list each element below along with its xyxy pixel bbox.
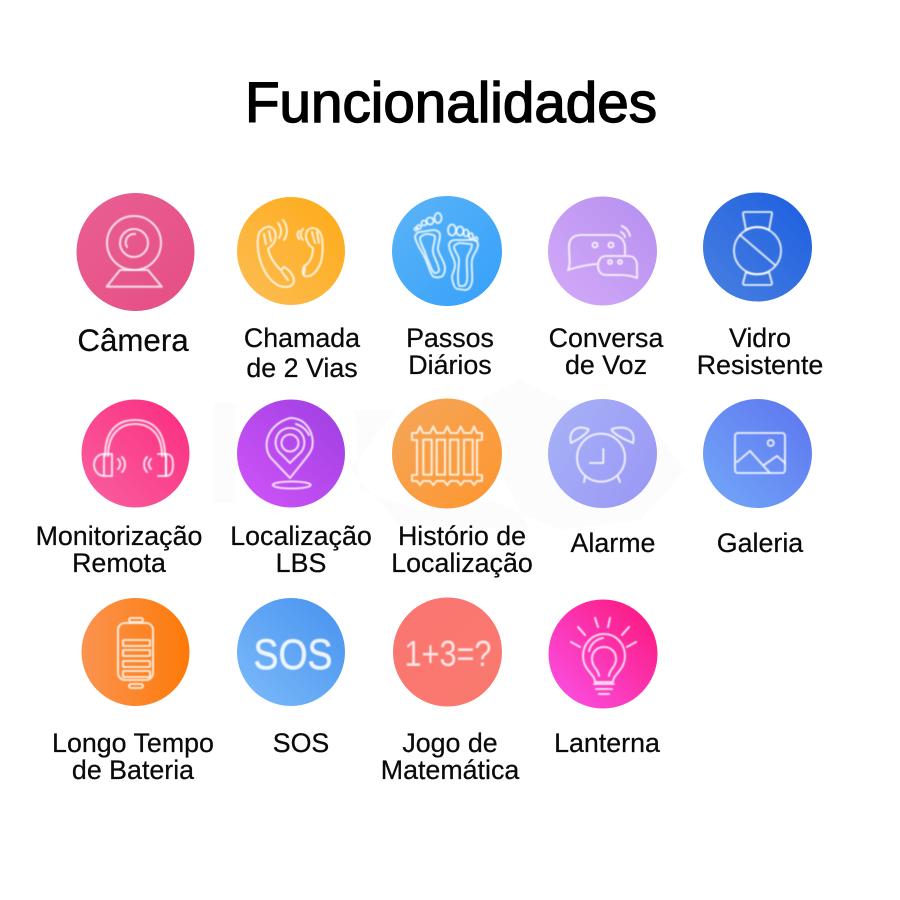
feature: LBS location: Localização bbox=[230, 521, 372, 551]
feature: LBS location: LBS bbox=[276, 548, 326, 578]
feature: SOS: SOS bbox=[254, 631, 332, 679]
feature: math game: Matemática bbox=[381, 755, 519, 785]
feature: camera bbox=[76, 193, 194, 358]
feature: remote monitoring bbox=[36, 400, 202, 578]
feature: resistant glass bbox=[697, 192, 823, 380]
feature: long battery life bbox=[52, 598, 214, 785]
feature: remote monitoring: Remota bbox=[72, 548, 166, 578]
feature: voice chat bbox=[548, 196, 663, 380]
feature: flashlight bbox=[548, 600, 660, 758]
feature: math game: 1+3=? bbox=[404, 633, 492, 674]
feature: voice chat: de Voz bbox=[565, 350, 647, 380]
feature: location history bbox=[391, 398, 533, 578]
feature: alarm bbox=[548, 399, 657, 558]
feature: daily steps: Diários bbox=[408, 350, 492, 380]
feature: remote monitoring: Monitorização bbox=[36, 521, 202, 551]
feature: LBS location bbox=[230, 400, 372, 578]
feature: daily steps bbox=[392, 196, 502, 380]
feature: long battery life: de Bateria bbox=[72, 755, 194, 785]
feature: two-way call: de 2 Vias bbox=[246, 353, 358, 383]
title: Funcionalidades bbox=[245, 71, 657, 134]
feature: location history: Histório de bbox=[398, 521, 526, 551]
feature: location history: Localização bbox=[391, 548, 533, 578]
feature: math game bbox=[381, 598, 519, 785]
feature: flashlight: Lanterna bbox=[554, 728, 660, 758]
feature: gallery bbox=[703, 399, 812, 558]
feature: two-way call: Chamada bbox=[244, 323, 360, 353]
feature: SOS: SOS bbox=[273, 728, 329, 758]
feature: long battery life: Longo Tempo bbox=[52, 728, 214, 758]
feature: camera: Câmera bbox=[77, 323, 189, 358]
feature: alarm: Alarme bbox=[571, 528, 655, 558]
feature: gallery: Galeria bbox=[717, 528, 803, 558]
feature: voice chat: Conversa bbox=[549, 323, 663, 353]
feature: SOS bbox=[237, 598, 345, 758]
feature: daily steps: Passos bbox=[406, 323, 494, 353]
feature: math game: Jogo de bbox=[402, 728, 498, 758]
feature: two-way call bbox=[237, 197, 360, 383]
feature: resistant glass: Vidro bbox=[729, 323, 791, 353]
feature: resistant glass: Resistente bbox=[697, 350, 823, 380]
